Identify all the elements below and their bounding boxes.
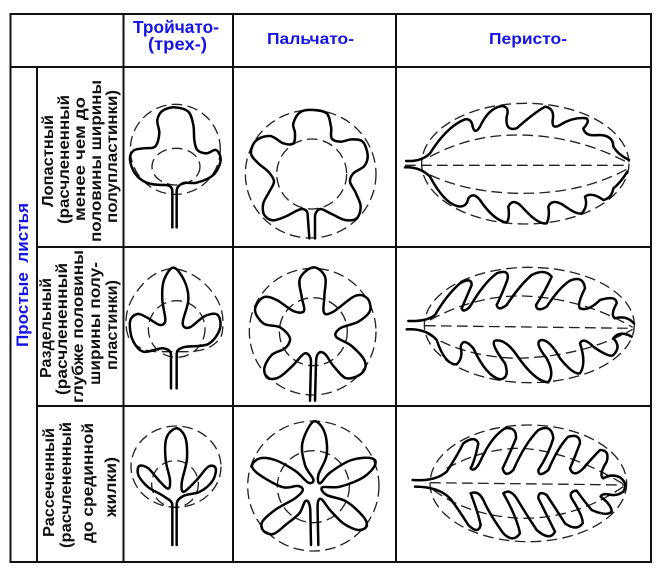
leaf: palmate dissected: [248, 421, 379, 551]
leaf: pinnate lobed: [405, 103, 629, 224]
row label: Раздельный: [38, 250, 121, 403]
leaf: palmate lobed: [245, 110, 376, 238]
row label: Рассеченный: [41, 422, 120, 548]
row label: Лопастный: полупластинки): [104, 90, 121, 223]
row label: Рассеченный: жилки): [103, 457, 120, 518]
column header: Тройчато- (трех-): [133, 17, 219, 54]
row label: Раздельный: (расчлененный: [54, 263, 71, 395]
leaf: ternate parted: [126, 268, 223, 388]
row label: Раздельный: ширины полу-: [87, 262, 104, 385]
column header: Тройчато- (трех-): Тройчато-: [133, 17, 219, 37]
row label: Раздельный: пластинки): [104, 280, 121, 370]
row group heading: Простые листья: Простые листья: [13, 203, 32, 347]
row label: Лопастный: менее чем до: [72, 97, 89, 221]
row label: Рассеченный: (расчлененный: [58, 422, 75, 548]
row label: Лопастный: половины ширины: [88, 80, 105, 242]
leaf: pinnate parted: [407, 267, 634, 383]
row label: Раздельный: Раздельный: [38, 278, 55, 378]
row label: Лопастный: Лопастный: [40, 115, 57, 207]
row label: Рассеченный: Рассеченный: [41, 428, 58, 537]
row label: Лопастный: [40, 80, 121, 242]
column header: Перисто-: Перисто-: [489, 31, 567, 48]
row label: Рассеченный: до срединной: [80, 423, 97, 543]
column header: Тройчато- (трех-): (трех-): [148, 34, 207, 54]
row label: Лопастный: (расчлененный: [56, 95, 73, 224]
leaf: palmate parted: [249, 267, 376, 401]
column header: Пальчато-: Пальчато-: [267, 31, 354, 48]
row label: Раздельный: глубже половины: [70, 250, 87, 403]
leaf: ternate lobed: [130, 104, 221, 227]
leaf: ternate dissected: [131, 426, 221, 545]
leaf: pinnate dissected: [413, 425, 627, 542]
